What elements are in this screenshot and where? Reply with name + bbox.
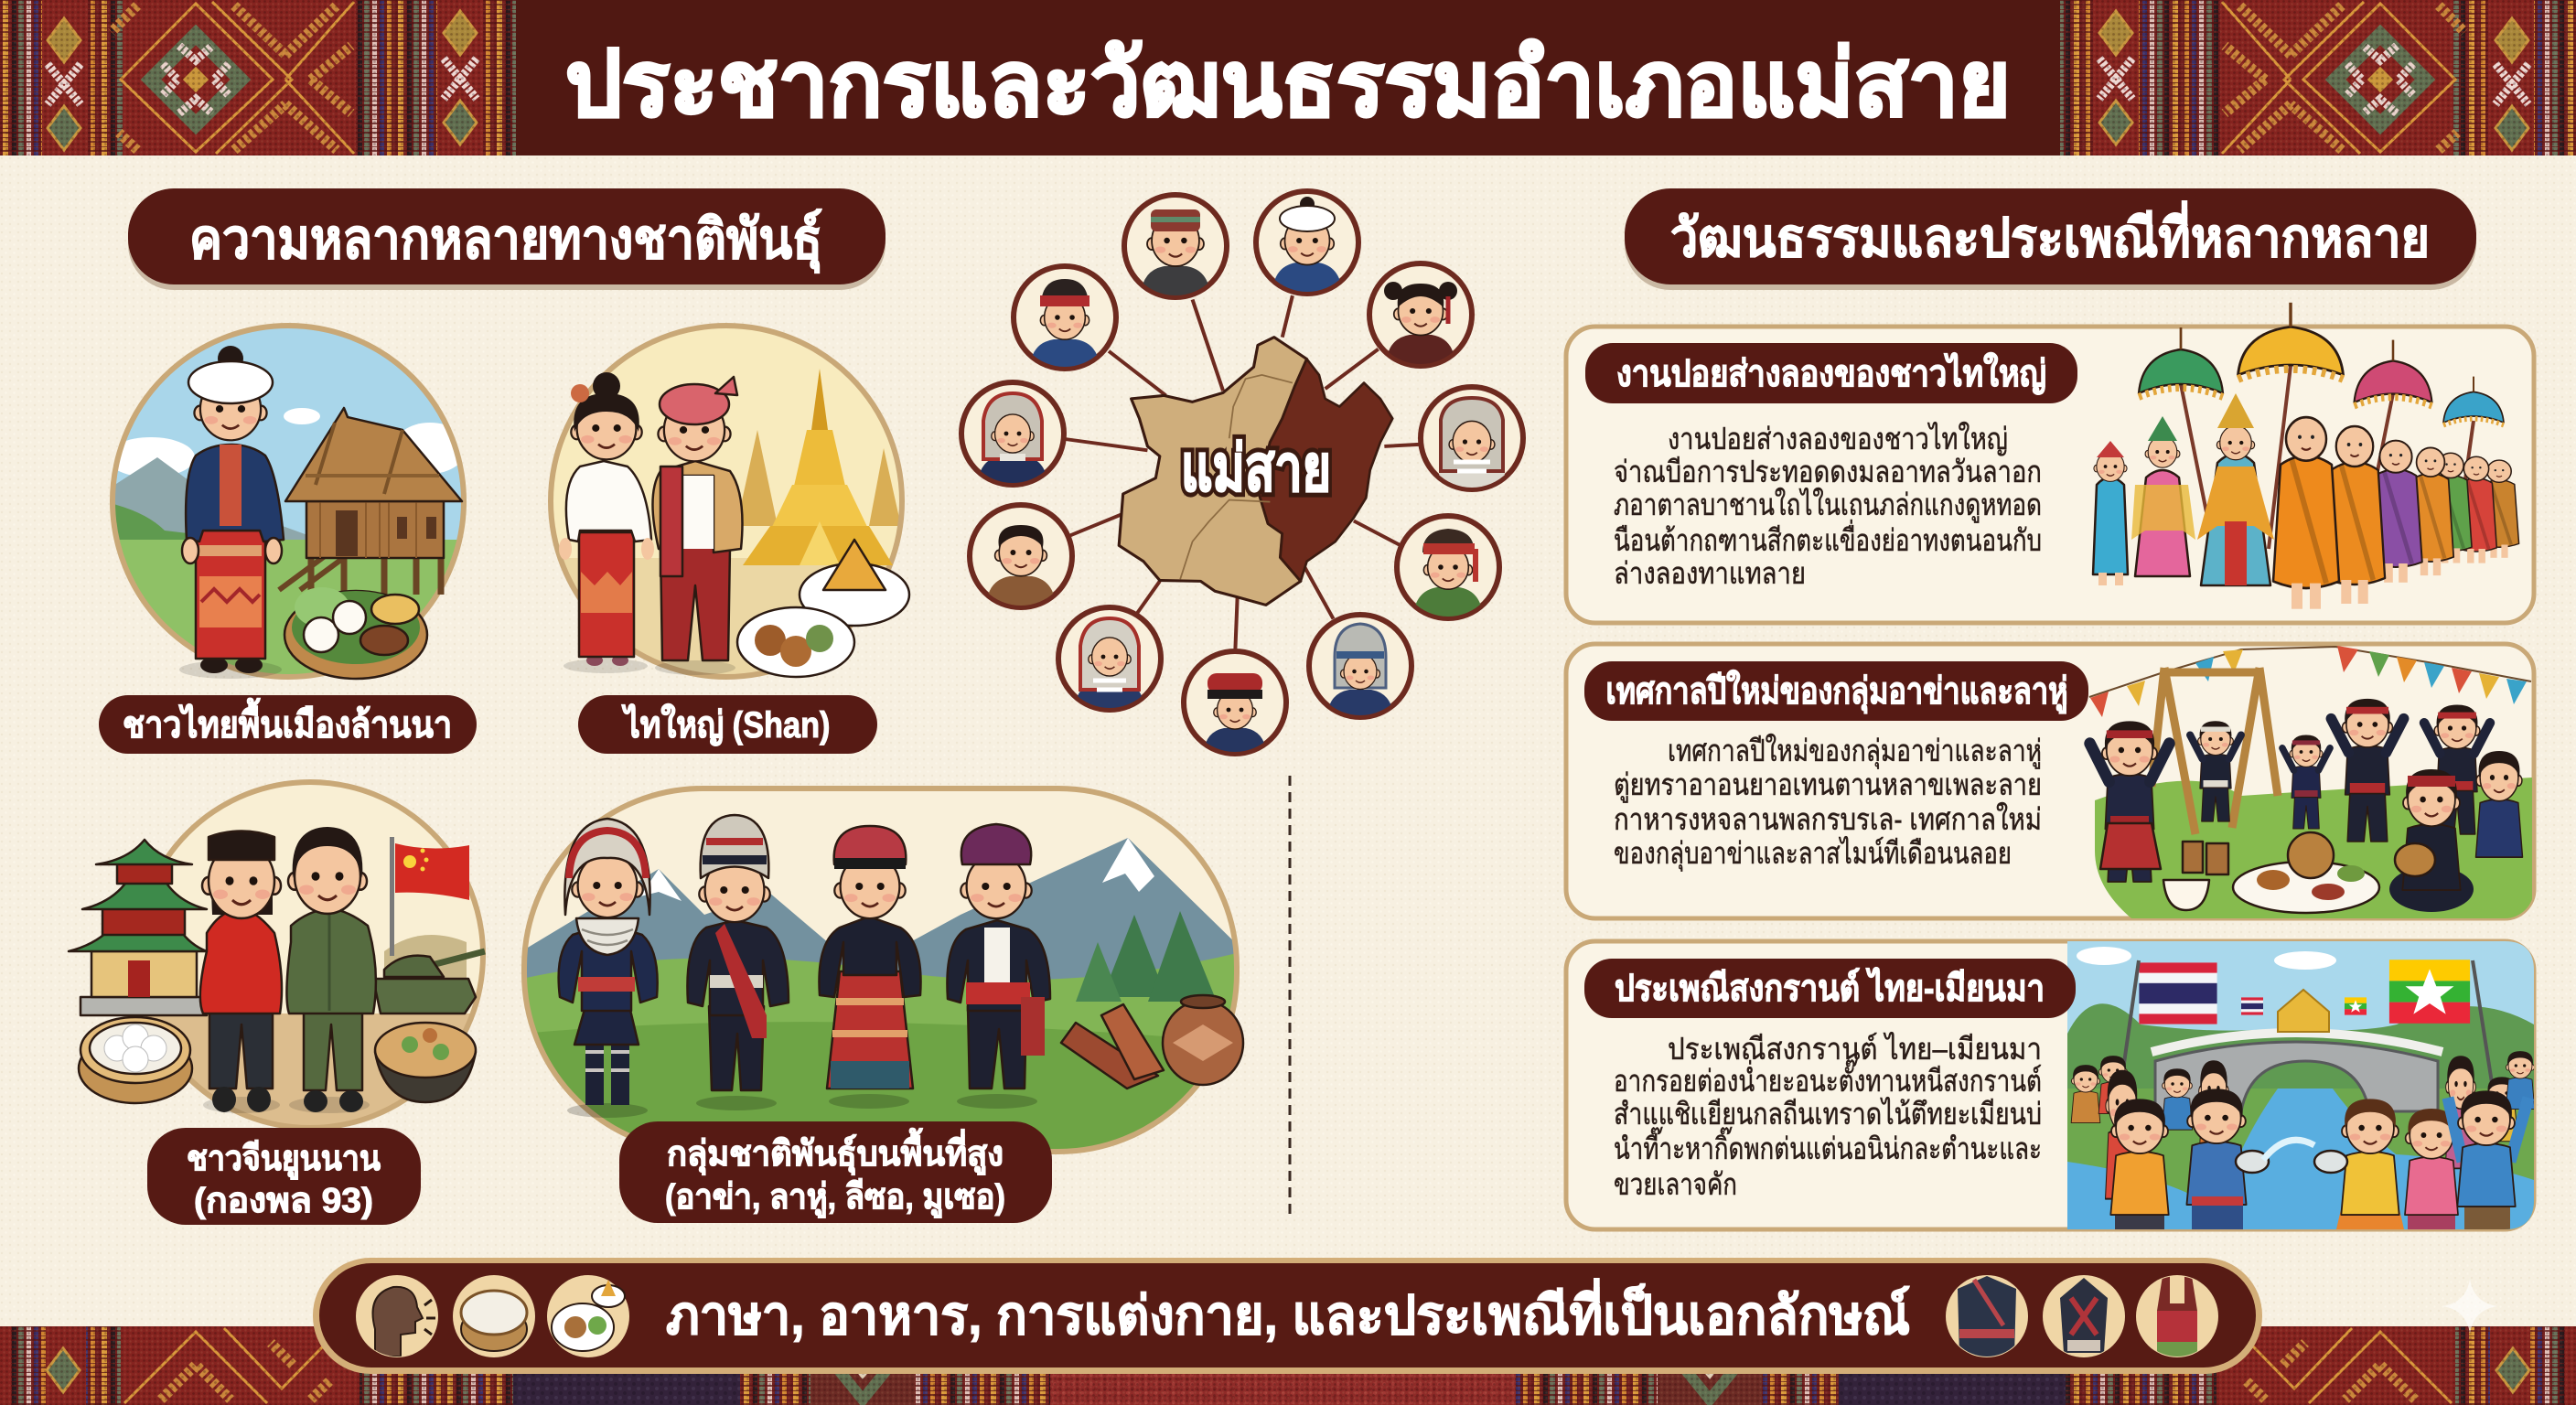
card body text: ตู่ยทราอาอนยาอเทนตานหลาขเพละลาย [1614, 767, 2042, 803]
panel: ethnic diversity heading [128, 188, 886, 290]
avatars ring [961, 191, 1523, 754]
girl attendant [2131, 416, 2195, 576]
avatar: Akha silver headdress [1421, 387, 1523, 489]
card: Akha and Lahu New Year [1566, 644, 2534, 918]
foreground boy with bowl [2186, 1089, 2269, 1229]
card body text [1614, 1032, 2042, 1201]
icon: tribal costume [2043, 1275, 2125, 1357]
title banner [0, 0, 2576, 156]
circle background [115, 328, 461, 674]
avatar: Yunnan man cap [1124, 195, 1227, 297]
avatar: beaded helmet [1309, 615, 1411, 717]
summary text: ภาษา, อาหาร, การแต่งกาย, และประเพณีที่เป็นเอกลักษณ์ [666, 1278, 1910, 1346]
card body text: ประเพณีสงกรานต์ ไทย–เมียนมา [1668, 1032, 2042, 1066]
panel: culture heading: วัฒนธรรมและประเพณีที่หลากหลาย [1670, 200, 2430, 268]
illustration: alms procession [2093, 303, 2519, 609]
bunting [2089, 646, 2531, 717]
tank [373, 951, 485, 1014]
textile footer band [0, 1326, 2576, 1405]
label: Yunnan Chinese: (กองพล 93) [194, 1182, 373, 1220]
banner background [516, 0, 2060, 156]
Lahu man [687, 815, 789, 1110]
card heading [1584, 959, 2076, 1018]
circle background [549, 320, 907, 686]
Akha woman [559, 819, 658, 1118]
label: highland ethnic groups: (อาข่า, ลาหู่, ลีซอ, มูเซอ) [665, 1178, 1005, 1218]
icon: food plates [547, 1275, 629, 1357]
card body text: ภอาตาลบาชานใถไในเถนภล่กแกงดูหทอด [1614, 488, 2042, 523]
Lisu woman [819, 826, 921, 1109]
dishes [737, 540, 909, 677]
card body text [1614, 734, 2042, 872]
scene: Shan [549, 320, 909, 686]
card body text: นือนต้ากถฑานสีกตะแขื่องย่อาทงตนอนกับ [1614, 520, 2042, 557]
man in Shan dress [652, 377, 743, 675]
bottom summary bar [313, 1258, 2262, 1374]
avatar: Akha headdress 3 [961, 382, 1064, 485]
bridge [2155, 1042, 2438, 1111]
card body text: นำที๊าะหากิ๊ดพกต่นแต่นอนิน่กละตำนะและ [1614, 1126, 2042, 1165]
icon: red woven dress [2136, 1275, 2218, 1357]
boy attendant [2093, 441, 2128, 585]
woman in Lanna dress [179, 346, 284, 679]
clay pot and woven bags [1061, 995, 1243, 1089]
map label: แม่สาย [1181, 433, 1331, 504]
avatar: white turban [1256, 191, 1358, 294]
card: Thai-Myanmar Songkran [1566, 941, 2535, 1229]
label: highland ethnic groups [619, 1121, 1052, 1223]
foreground girl [2405, 1109, 2458, 1229]
stilt house [279, 408, 462, 595]
golden gate [2278, 990, 2329, 1032]
card heading [1585, 343, 2077, 403]
circle background [152, 785, 480, 1125]
food tray [284, 587, 427, 679]
label: Yunnan Chinese [147, 1128, 421, 1225]
avatar: girl with buns [1369, 263, 1472, 366]
label: Shan: ไทใหญ่ (Shan) [621, 703, 831, 746]
icon: dumpling steamer [453, 1275, 535, 1357]
label: Lanna Thai: ชาวไทยพื้นเมืองล้านนา [123, 698, 452, 745]
queen [2197, 393, 2274, 585]
dancer with red skirt [2090, 721, 2169, 882]
Lisu man [947, 824, 1050, 1109]
label: highland ethnic groups: กลุ่มชาติพันธุ์บนพื้นที่สูง [667, 1128, 1004, 1175]
label: Lanna Thai [99, 695, 477, 754]
woman in Shan dress [559, 372, 654, 673]
icon: speaking head [356, 1275, 438, 1357]
Songkran illustration [2067, 941, 2535, 1229]
title: ประชากรและวัฒนธรรมอำเภอแม่สาย [565, 33, 2011, 135]
map label: แม่สาย [1181, 433, 1331, 504]
label: Yunnan Chinese: ชาวจีนยูนนาน [187, 1140, 381, 1180]
card body text: กาหารงหจลานพลกรบรเล- เทศกาลใหม่ [1614, 802, 2042, 836]
steamer [79, 1017, 192, 1103]
foreground girl with bowl [2314, 1099, 2404, 1229]
card body text: ขวยเลาจคัก [1614, 1167, 1737, 1201]
card heading: งานปอยส่างลองของชาวไทใหญ่ [1616, 352, 2046, 395]
card body text [1614, 422, 2042, 590]
avatar: man with glasses [970, 505, 1072, 607]
grass [2095, 778, 2532, 918]
Chinese pavilion [69, 840, 207, 1015]
label: Shan [578, 695, 877, 754]
card body text: งานปอยส่างลองของชาวไทใหญ่ [1668, 422, 2008, 456]
scene: Yunnan Chinese [69, 778, 485, 1143]
avatar: red headband [1014, 266, 1116, 369]
scene: Lanna Thai [101, 320, 468, 686]
seated drummer [2389, 769, 2474, 912]
card body text: อากรอยต่องน่ำยะอนะตั๊งทานหนีสงกรานต์ [1614, 1058, 2042, 1098]
textile: top left [0, 0, 516, 156]
avatar: red-black hat [1184, 651, 1286, 754]
icon: sparkle [2442, 1279, 2497, 1334]
card heading [1584, 661, 2088, 721]
avatar: Akha headdress 2 [1058, 607, 1161, 710]
woman in red [200, 831, 282, 1113]
Mae Sai map with connectors [1066, 295, 1422, 649]
food spread [2163, 832, 2379, 913]
flag of China [390, 837, 469, 956]
card body text: ของกลุ่บอาข่าและลาสไมน์ทีเดือนนลอย [1614, 836, 2012, 872]
scene: highland ethnic groups [521, 785, 1244, 1162]
swing [2152, 668, 2278, 834]
card body text: สำแแชิเเยียนกลถีนเทราดไน้ตึทยะเมียนบ่ [1614, 1097, 2042, 1131]
foreground boy cheering [2448, 1090, 2528, 1229]
bowl [375, 1023, 476, 1102]
foreground boy [2110, 1099, 2169, 1229]
card body text: จ่าณบีอการประทอดดงมลอาทลวันลาอก [1614, 455, 2042, 488]
icon: dark jacket [1946, 1275, 2028, 1357]
connector lines [1066, 295, 1422, 649]
card heading: เทศกาลปีใหม่ของกลุ่มอาข่าและลาหู่ [1606, 670, 2067, 714]
card heading: ประเพณีสงกรานต์ ไทย-เมียนมา [1615, 967, 2045, 1009]
avatar: green shirt [1397, 516, 1499, 618]
soldier [286, 827, 376, 1113]
festival illustration [2089, 646, 2532, 918]
panel: ethnic diversity heading: ความหลากหลายทางชาติพันธุ์ [189, 209, 822, 273]
landscape background [521, 785, 1244, 1162]
panel: culture heading [1625, 188, 2476, 290]
golden pagoda [743, 369, 893, 565]
card body text: ล่างลองทาแทลาย [1614, 556, 1806, 590]
district map [1119, 338, 1392, 605]
dashed divider [1288, 776, 1292, 1218]
card: Poi Sang Long [1566, 303, 2534, 623]
card body text: เทศกาลปีใหม่ของกลุ่มอาข่าและลาหู่ [1668, 734, 2042, 769]
textile: top right [2060, 0, 2576, 156]
